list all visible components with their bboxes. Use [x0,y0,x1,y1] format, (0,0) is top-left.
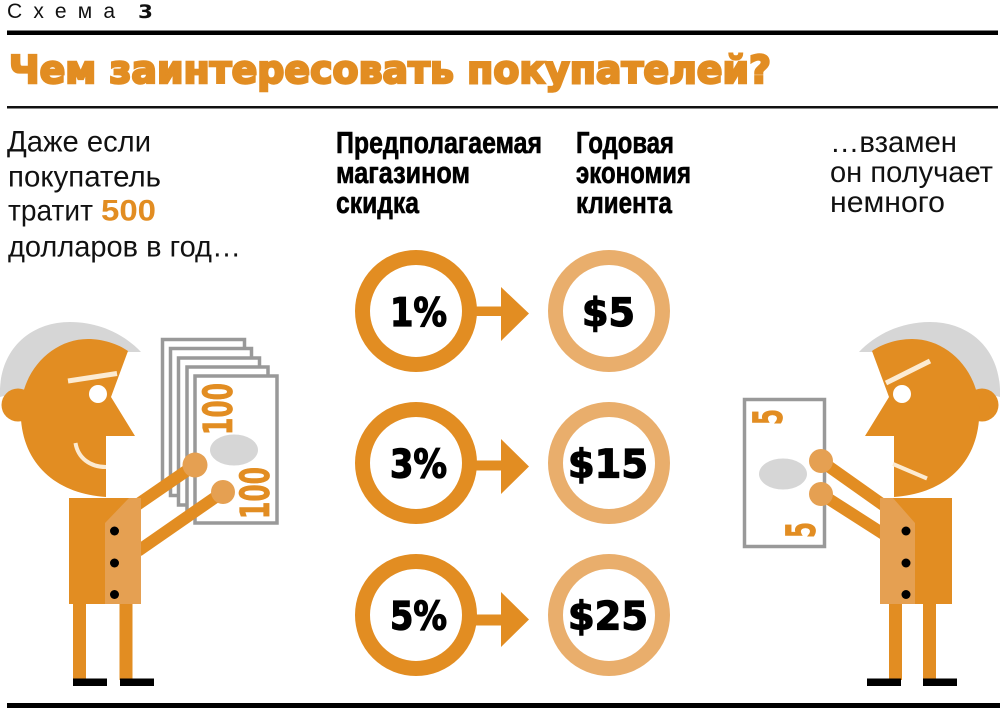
text block: left intro: долларов в год… [8,230,241,264]
text block: left intro [7,126,241,264]
text block: right outro [830,126,993,219]
title: Чем заинтересовать покупателей? [9,48,771,93]
ear [2,388,34,422]
text block: left intro: тратит [8,194,93,228]
text block: left intro: 500 [101,194,156,228]
eye [89,385,107,403]
text block: left intro: покупатель [8,160,161,194]
heading: annual customer savings [576,125,691,220]
text block: right outro: …взамен [830,126,957,159]
heading: annual customer savings: Годовая [576,125,674,160]
row: 5% gives $25 [362,562,662,668]
legs and shoes [73,600,154,686]
row: 1% gives $5: 1% [390,291,447,336]
row: 1% gives $5 [362,258,662,364]
illustration: left man with stack of bills [0,322,279,686]
icon: 5 bill: 5 [779,522,825,538]
heading: assumed store discount: скидка [336,185,420,220]
smile [76,443,106,467]
label: scheme number: Схема [7,0,115,23]
label: scheme number: 3 [138,1,153,23]
eyebrow [886,361,930,383]
heading: annual customer savings: экономия [576,155,691,190]
eyebrow [68,374,117,381]
heading: annual customer savings: клиента [576,185,673,220]
face [865,339,979,497]
row: 3% gives $15 [362,410,662,516]
icon: 5 bill [744,400,825,546]
heading: assumed store discount: магазином [336,155,470,190]
heading: assumed store discount: Предполагаемая [336,125,542,160]
ear [966,388,998,422]
hair [0,322,141,397]
text block: right outro: он получает [830,156,993,189]
row: 1% gives $5: $5 [582,291,635,336]
arms and hands [134,452,235,551]
icon: stack of 100 bills: 100 [233,467,279,519]
text block: left intro: Даже если [7,126,151,158]
jacket [880,498,952,604]
heading: assumed store discount [336,125,542,220]
icon: 5 bill: 5 [746,409,792,425]
illustration: right man with one bill [744,322,1000,686]
icon: stack of 100 bills [162,340,279,523]
arms and hands [809,449,886,535]
row: 3% gives $15: 3% [390,442,447,488]
eye [893,385,911,403]
icon: stack of 100 bills: 100 [196,383,242,435]
legs and shoes [867,600,957,686]
row: 5% gives $25: 5% [390,594,447,640]
row: 5% gives $25: $25 [568,594,648,640]
face [21,339,135,497]
jacket [69,498,141,604]
mouth [893,464,927,478]
hair [859,322,1000,397]
text block: right outro: немного [830,186,945,219]
row: 3% gives $15: $15 [568,442,648,488]
